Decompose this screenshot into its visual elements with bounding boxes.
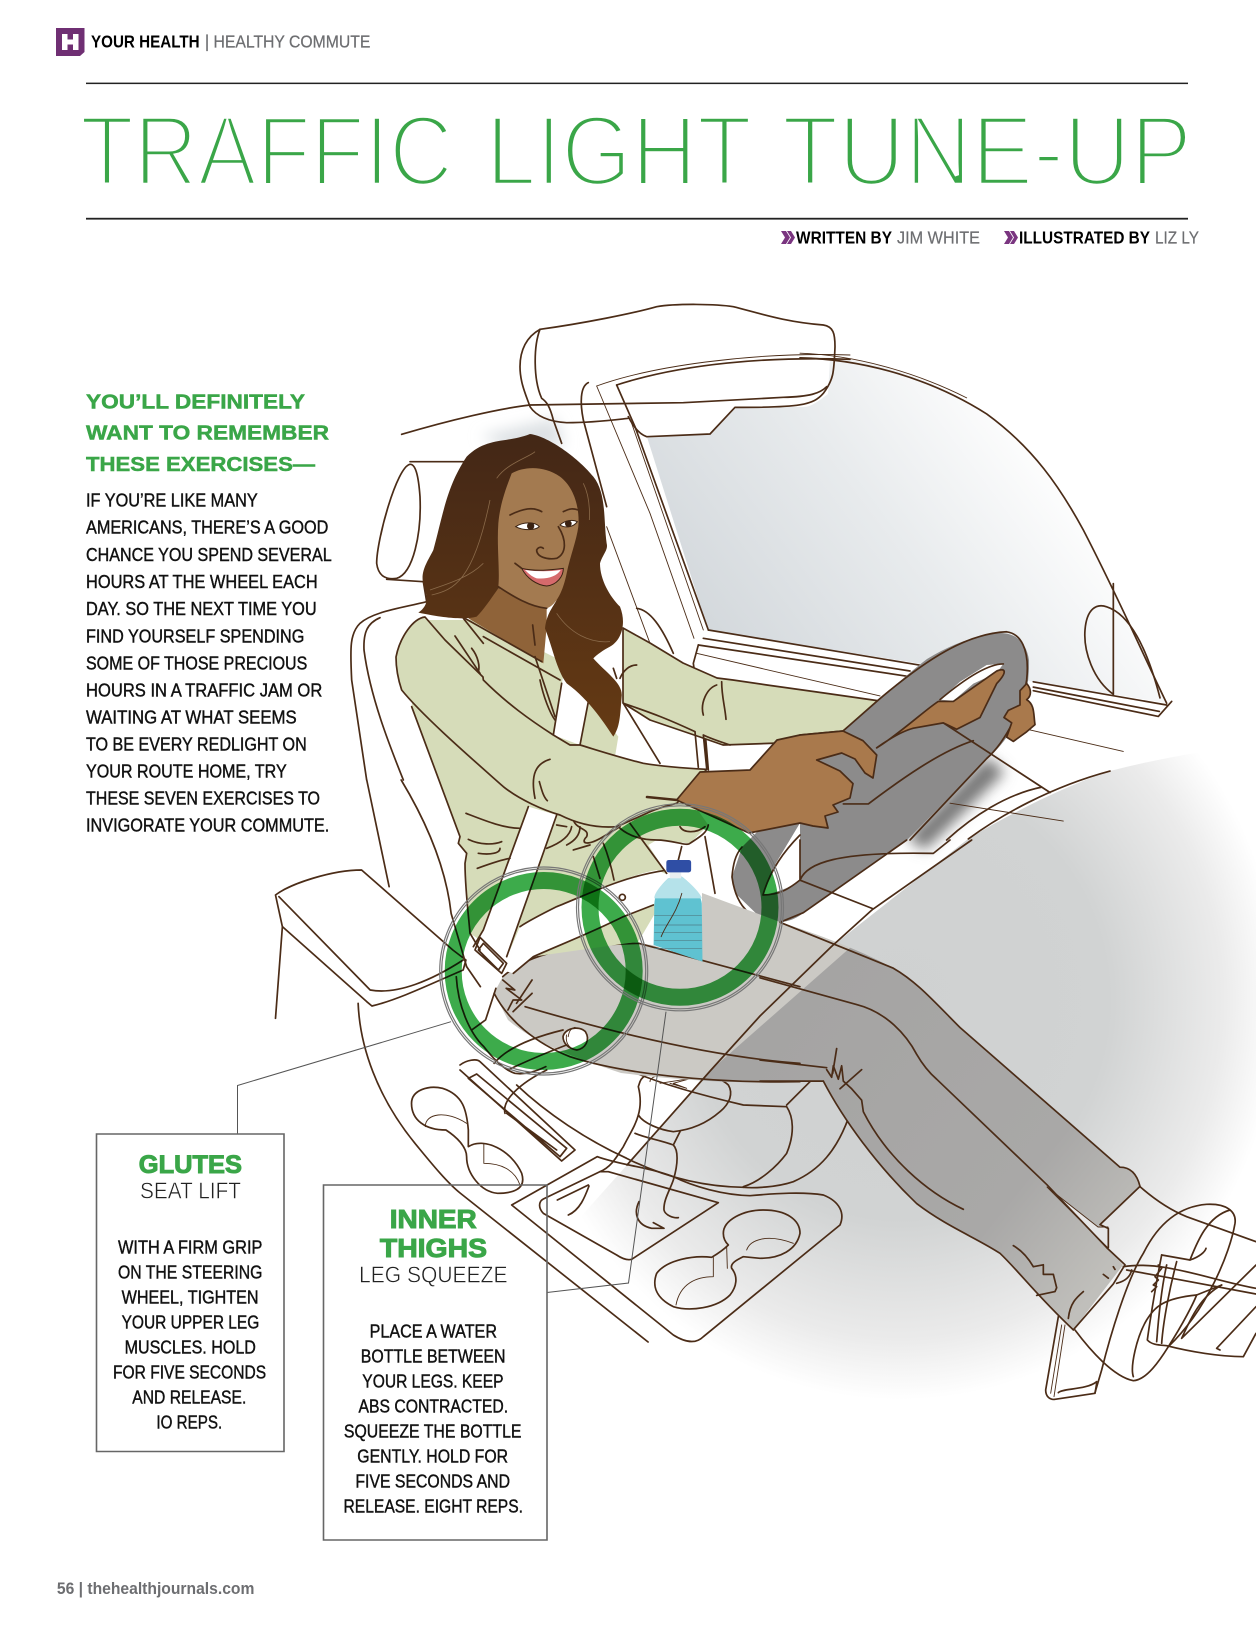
driver: hands xyxy=(647,670,1035,833)
glutes instructions: WHEEL, TIGHTEN xyxy=(122,1287,259,1307)
inner thighs instructions: ABS CONTRACTED. xyxy=(358,1396,508,1416)
inner thighs instructions: YOUR LEGS. KEEP xyxy=(362,1371,504,1391)
glutes instructions: WITH A FIRM GRIP xyxy=(118,1238,262,1258)
section name: YOUR HEALTH xyxy=(91,32,200,52)
panel: inner thighs xyxy=(324,1185,547,1540)
glutes instructions xyxy=(113,1238,266,1432)
title xyxy=(80,96,1192,207)
steering wheel xyxy=(732,632,1050,923)
glutes exercise name: SEAT LIFT xyxy=(140,1177,241,1203)
driver: hair xyxy=(418,434,623,737)
inner thighs instructions xyxy=(344,1322,523,1516)
icon: chevrons xyxy=(781,231,795,244)
driver: shoes and pedal xyxy=(1046,1187,1256,1399)
driver: shirt torso, belts and hem xyxy=(412,620,730,973)
driver: far arm xyxy=(623,628,880,745)
wheel openings xyxy=(763,823,800,895)
hood edge crossing the legs xyxy=(627,909,873,1165)
glutes instructions: YOUR UPPER LEG xyxy=(122,1312,259,1332)
windshield arc and mirror xyxy=(800,353,1172,840)
seat belts xyxy=(553,677,590,745)
byline xyxy=(781,228,1199,248)
inner thighs heading: THIGHS xyxy=(380,1235,487,1263)
intro heading: THESE EXERCISES— xyxy=(86,453,316,476)
shadow beside steering wheel xyxy=(907,757,1005,850)
glutes instructions: IO REPS. xyxy=(156,1412,222,1432)
intro body xyxy=(86,491,332,836)
water bottle xyxy=(654,860,702,962)
inner thighs instructions: SQUEEZE THE BOTTLE xyxy=(344,1421,522,1441)
intro body: DAY. SO THE NEXT TIME YOU xyxy=(86,599,317,619)
roof shadow xyxy=(480,418,565,452)
glutes instructions: AND RELEASE. xyxy=(132,1387,246,1407)
intro body: TO BE EVERY REDLIGHT ON xyxy=(86,735,307,755)
intro text block xyxy=(86,390,332,836)
header: section label xyxy=(56,28,370,56)
center console, gear shifter and cup holders xyxy=(460,1057,848,1341)
intro body: THESE SEVEN EXERCISES TO xyxy=(86,789,320,809)
icon: chevrons xyxy=(1004,231,1018,244)
driver: face xyxy=(498,468,579,608)
byline: ILLUSTRATED BY xyxy=(1019,228,1150,248)
glutes instructions: ON THE STEERING xyxy=(118,1262,262,1282)
intro body: HOURS AT THE WHEEL EACH xyxy=(86,572,318,592)
intro body: SOME OF THOSE PRECIOUS xyxy=(86,654,307,674)
intro heading: WANT TO REMEMBER xyxy=(86,421,329,444)
inner thighs heading xyxy=(380,1206,487,1263)
leader line: inner thighs xyxy=(547,1012,666,1292)
inner thighs exercise name: LEG SQUEEZE xyxy=(359,1261,508,1287)
intro body: HOURS IN A TRAFFIC JAM OR xyxy=(86,681,322,701)
inner thighs instructions: RELEASE. EIGHT REPS. xyxy=(344,1496,523,1516)
byline: WRITTEN BY xyxy=(796,228,892,248)
intro heading xyxy=(86,390,329,476)
title: LIGHT xyxy=(486,96,752,207)
byline: JIM WHITE xyxy=(897,228,980,248)
intro body: INVIGORATE YOUR COMMUTE. xyxy=(86,816,329,836)
illustration: car interior with driver xyxy=(275,304,1256,1500)
intro body: IF YOU’RE LIKE MANY xyxy=(86,491,258,511)
title: TUNE-UP xyxy=(782,96,1192,207)
armrest, seat base, left cup holder xyxy=(275,780,648,1342)
footer: page number and url: 56 | thehealthjournals.com xyxy=(57,1579,254,1598)
glutes instructions: MUSCLES. HOLD xyxy=(125,1337,256,1357)
inner thighs heading: INNER xyxy=(390,1206,477,1234)
gap between the ankles xyxy=(1047,1187,1108,1248)
intro body: WAITING AT WHAT SEEMS xyxy=(86,708,297,728)
driver: pants xyxy=(494,893,1140,1330)
highlight ring: glutes xyxy=(440,867,648,1075)
byline: LIZ LY xyxy=(1155,228,1199,248)
driver: neck and collar xyxy=(455,588,726,719)
seat base, seat adjuster knob xyxy=(456,967,587,1074)
headrest and seat xyxy=(351,462,467,780)
glutes instructions: FOR FIVE SECONDS xyxy=(113,1362,266,1382)
roof, visor and windshield lines xyxy=(402,304,923,770)
inner thighs instructions: GENTLY. HOLD FOR xyxy=(357,1446,508,1466)
panel: glutes xyxy=(96,1134,284,1452)
intro body: AMERICANS, THERE’S A GOOD xyxy=(86,518,328,538)
windshield tint xyxy=(647,358,1167,703)
title: TRAFFIC xyxy=(80,96,453,207)
eyes, nose and mouth xyxy=(510,509,578,586)
leader line: glutes xyxy=(238,1022,451,1134)
hood and floor shadow xyxy=(560,744,1256,1500)
intro body: FIND YOURSELF SPENDING xyxy=(86,627,304,647)
inner thighs instructions: BOTTLE BETWEEN xyxy=(361,1346,506,1366)
intro body: CHANCE YOU SPEND SEVERAL xyxy=(86,545,332,565)
inner thighs instructions: FIVE SECONDS AND xyxy=(355,1471,510,1491)
driver: near arm xyxy=(396,617,707,827)
intro body: YOUR ROUTE HOME, TRY xyxy=(86,762,287,782)
glutes heading: GLUTES xyxy=(139,1151,242,1179)
highlight ring: inner thighs xyxy=(576,804,784,1011)
section separator and topic: | HEALTHY COMMUTE xyxy=(205,32,370,52)
intro heading: YOU’LL DEFINITELY xyxy=(86,390,305,413)
inner thighs instructions: PLACE A WATER xyxy=(370,1322,497,1342)
icon: H logo xyxy=(56,28,84,56)
